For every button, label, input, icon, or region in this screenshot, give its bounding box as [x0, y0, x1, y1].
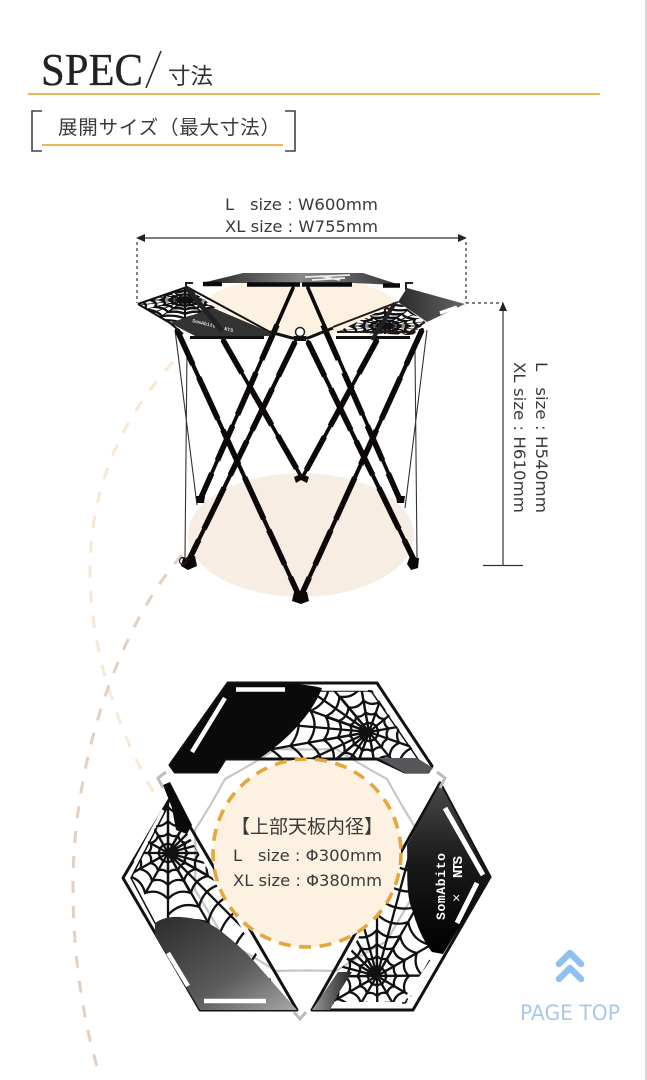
table top ellipse: [205, 277, 395, 335]
height dimension label: XL size : H610mm: [510, 362, 529, 513]
left top panel web: [140, 288, 218, 322]
inner diameter text: [231, 816, 383, 890]
right top panel web: [339, 304, 425, 335]
icon: double chevron: [559, 953, 581, 979]
right top solid section: [398, 288, 465, 322]
page top button: [520, 953, 620, 1025]
foot ring: [180, 558, 186, 564]
panel: left: [122, 782, 298, 1012]
black upper tab: [163, 782, 192, 834]
logo text: [434, 853, 467, 920]
width dimension label: XL size : W755mm: [225, 217, 378, 236]
inner diameter text: 【上部天板内径】: [231, 816, 383, 838]
height dimension label: [510, 362, 551, 513]
width dimension label: L size : W600mm: [225, 195, 378, 214]
rear legs: [200, 288, 400, 500]
title rule: [28, 93, 600, 95]
width dimension arrow: [136, 234, 467, 303]
left lower black bar: [190, 336, 264, 339]
width dimension label: [225, 195, 378, 236]
centre hinge block: [294, 336, 306, 341]
feet: [181, 474, 419, 604]
grey foot: [378, 758, 433, 773]
right solid white slot: [440, 307, 457, 313]
logo text: NTS: [451, 856, 467, 878]
logo text: ×: [448, 894, 464, 902]
right lower black bar: [336, 336, 410, 339]
rear leg joints: [200, 325, 400, 500]
scalloped centre frame: [195, 749, 417, 971]
inner diameter circle: [213, 759, 401, 947]
height dimension arrow: [466, 302, 523, 566]
grey foot: [312, 972, 352, 1010]
left top strap: [187, 288, 222, 331]
front legs: [177, 330, 422, 598]
left solid tiny logo: SomAbito × NTS: [192, 318, 234, 334]
centre hinge: [270, 328, 333, 338]
solid grey section: [155, 917, 297, 1010]
title: SPEC / 寸法: 寸法: [168, 64, 213, 89]
top view of table: [122, 682, 492, 1021]
title: SPEC / 寸法: [41, 44, 213, 95]
sub-heading: 展開サイズ（最大寸法）: 展開サイズ（最大寸法）: [58, 117, 280, 139]
panel: top: [168, 682, 434, 774]
sub-heading: 展開サイズ（最大寸法）: [32, 111, 295, 151]
table floor ellipse: [188, 473, 414, 597]
panel: right: [310, 781, 492, 1012]
decorative connector: lower dashed curve: [73, 555, 182, 1076]
left top solid section: [170, 308, 272, 337]
top hinge knobs: [186, 283, 413, 290]
centre white knob: [296, 328, 304, 336]
solid black section with logo: [407, 784, 490, 954]
back top panel: [202, 273, 400, 285]
right top panel outline: [333, 302, 425, 332]
back top panel web section: [305, 275, 350, 280]
hinges: [158, 772, 445, 1019]
title: SPEC / 寸法: SPEC: [41, 44, 143, 95]
right strap: [372, 303, 395, 340]
page top button: PAGE TOP: [520, 1001, 620, 1025]
side view of folding table: [138, 273, 465, 604]
back top panel black bars: [203, 284, 400, 286]
page edge line: [645, 0, 647, 1080]
logo text: SomAbito: [434, 853, 449, 920]
inner diameter text: L size : Φ300mm: [233, 846, 382, 865]
inner diameter text: XL size : Φ380mm: [233, 871, 382, 890]
height dimension label: L size : H540mm: [532, 362, 551, 513]
solid black section: [170, 684, 322, 772]
guy cords: [175, 330, 427, 557]
left lower edge: [138, 304, 183, 334]
decorative connector: upper dashed curve: [90, 362, 173, 798]
left top panel outline: [138, 287, 270, 332]
front leg joints: [177, 330, 422, 598]
